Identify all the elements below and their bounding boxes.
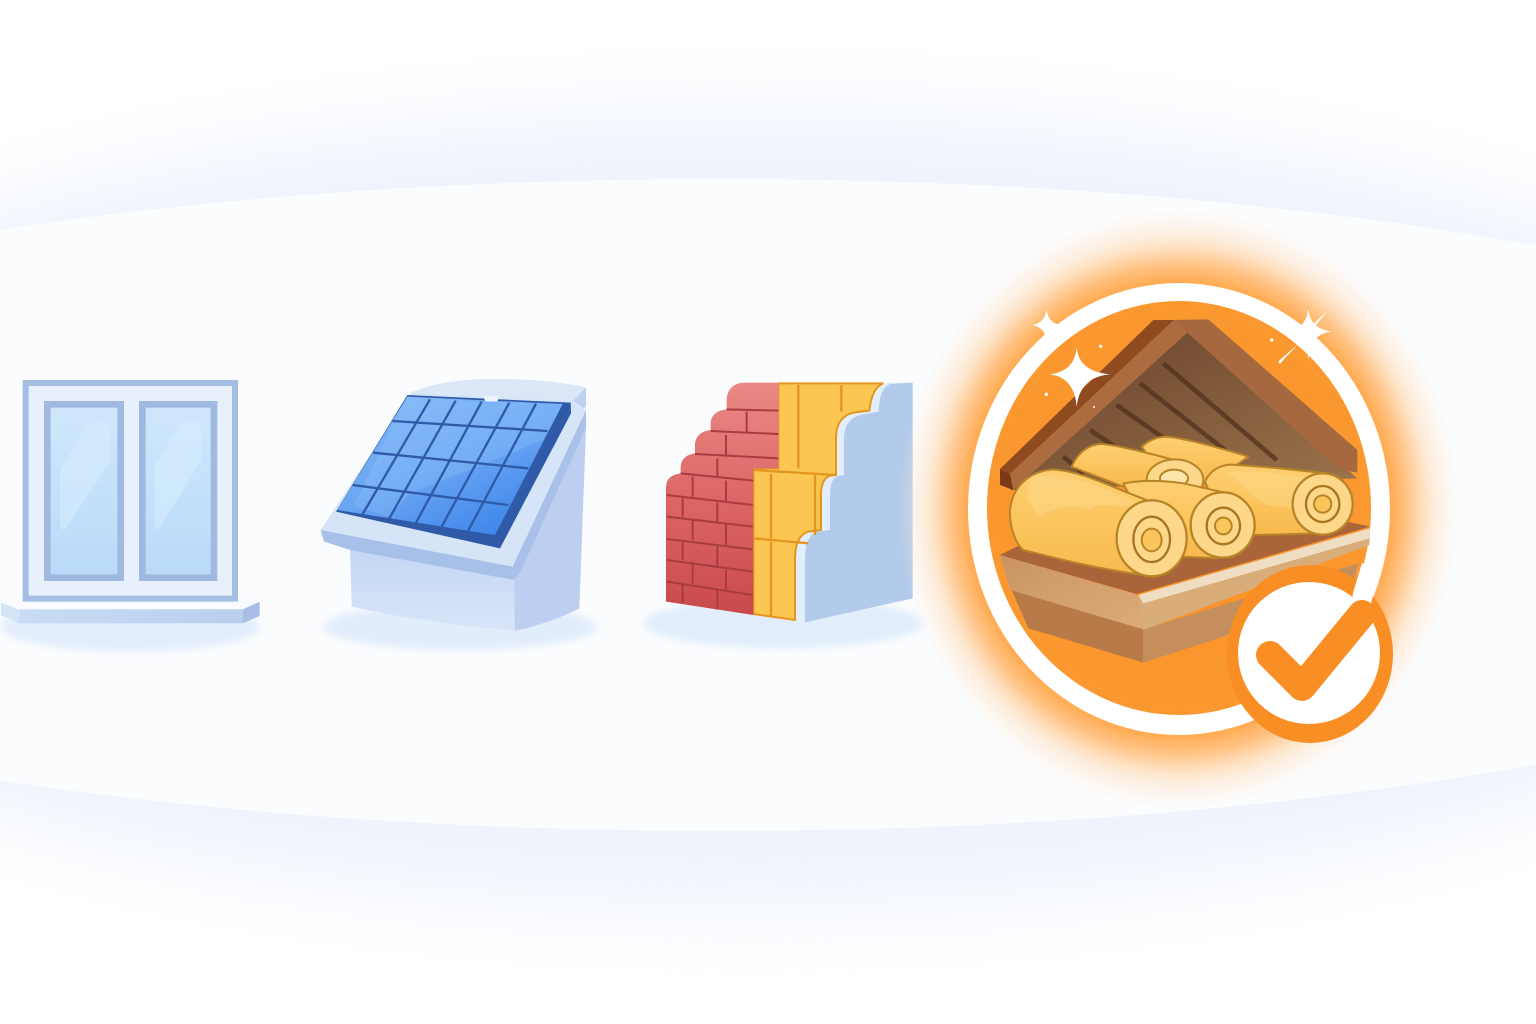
right rafter	[1170, 319, 1357, 472]
right pane	[142, 404, 214, 578]
right roll	[1205, 465, 1353, 535]
window ground shadow	[0, 602, 260, 652]
orange glow	[899, 209, 1459, 809]
back left roll	[1072, 444, 1203, 501]
icon: brick wall with insulation layers	[643, 383, 923, 648]
left pane	[47, 404, 121, 578]
floor boards	[1000, 522, 1370, 663]
sparkles	[1032, 308, 1332, 408]
middle roll	[1123, 481, 1255, 558]
white ring	[968, 283, 1390, 735]
attic interior	[1010, 327, 1357, 490]
highlighted attic insulation badge	[899, 209, 1459, 809]
check badge	[1227, 563, 1393, 743]
window sill	[1, 597, 260, 623]
wall ground shadow	[643, 598, 923, 648]
orange disc	[987, 301, 1371, 715]
attic illustration	[1000, 308, 1370, 663]
left rafter	[1000, 320, 1187, 490]
brick wall	[666, 383, 778, 615]
solar ground shadow	[323, 603, 597, 650]
window frame	[26, 383, 235, 599]
foam board face	[805, 383, 913, 622]
yellow insulation	[753, 383, 883, 620]
back right roll	[1142, 437, 1248, 483]
foam board edge	[795, 383, 913, 622]
solar panel	[336, 395, 571, 548]
icon: double-glazed window	[0, 383, 260, 652]
icon: solar panel on roof block	[321, 379, 597, 650]
front roll	[1010, 469, 1187, 576]
roof block body	[321, 379, 586, 631]
